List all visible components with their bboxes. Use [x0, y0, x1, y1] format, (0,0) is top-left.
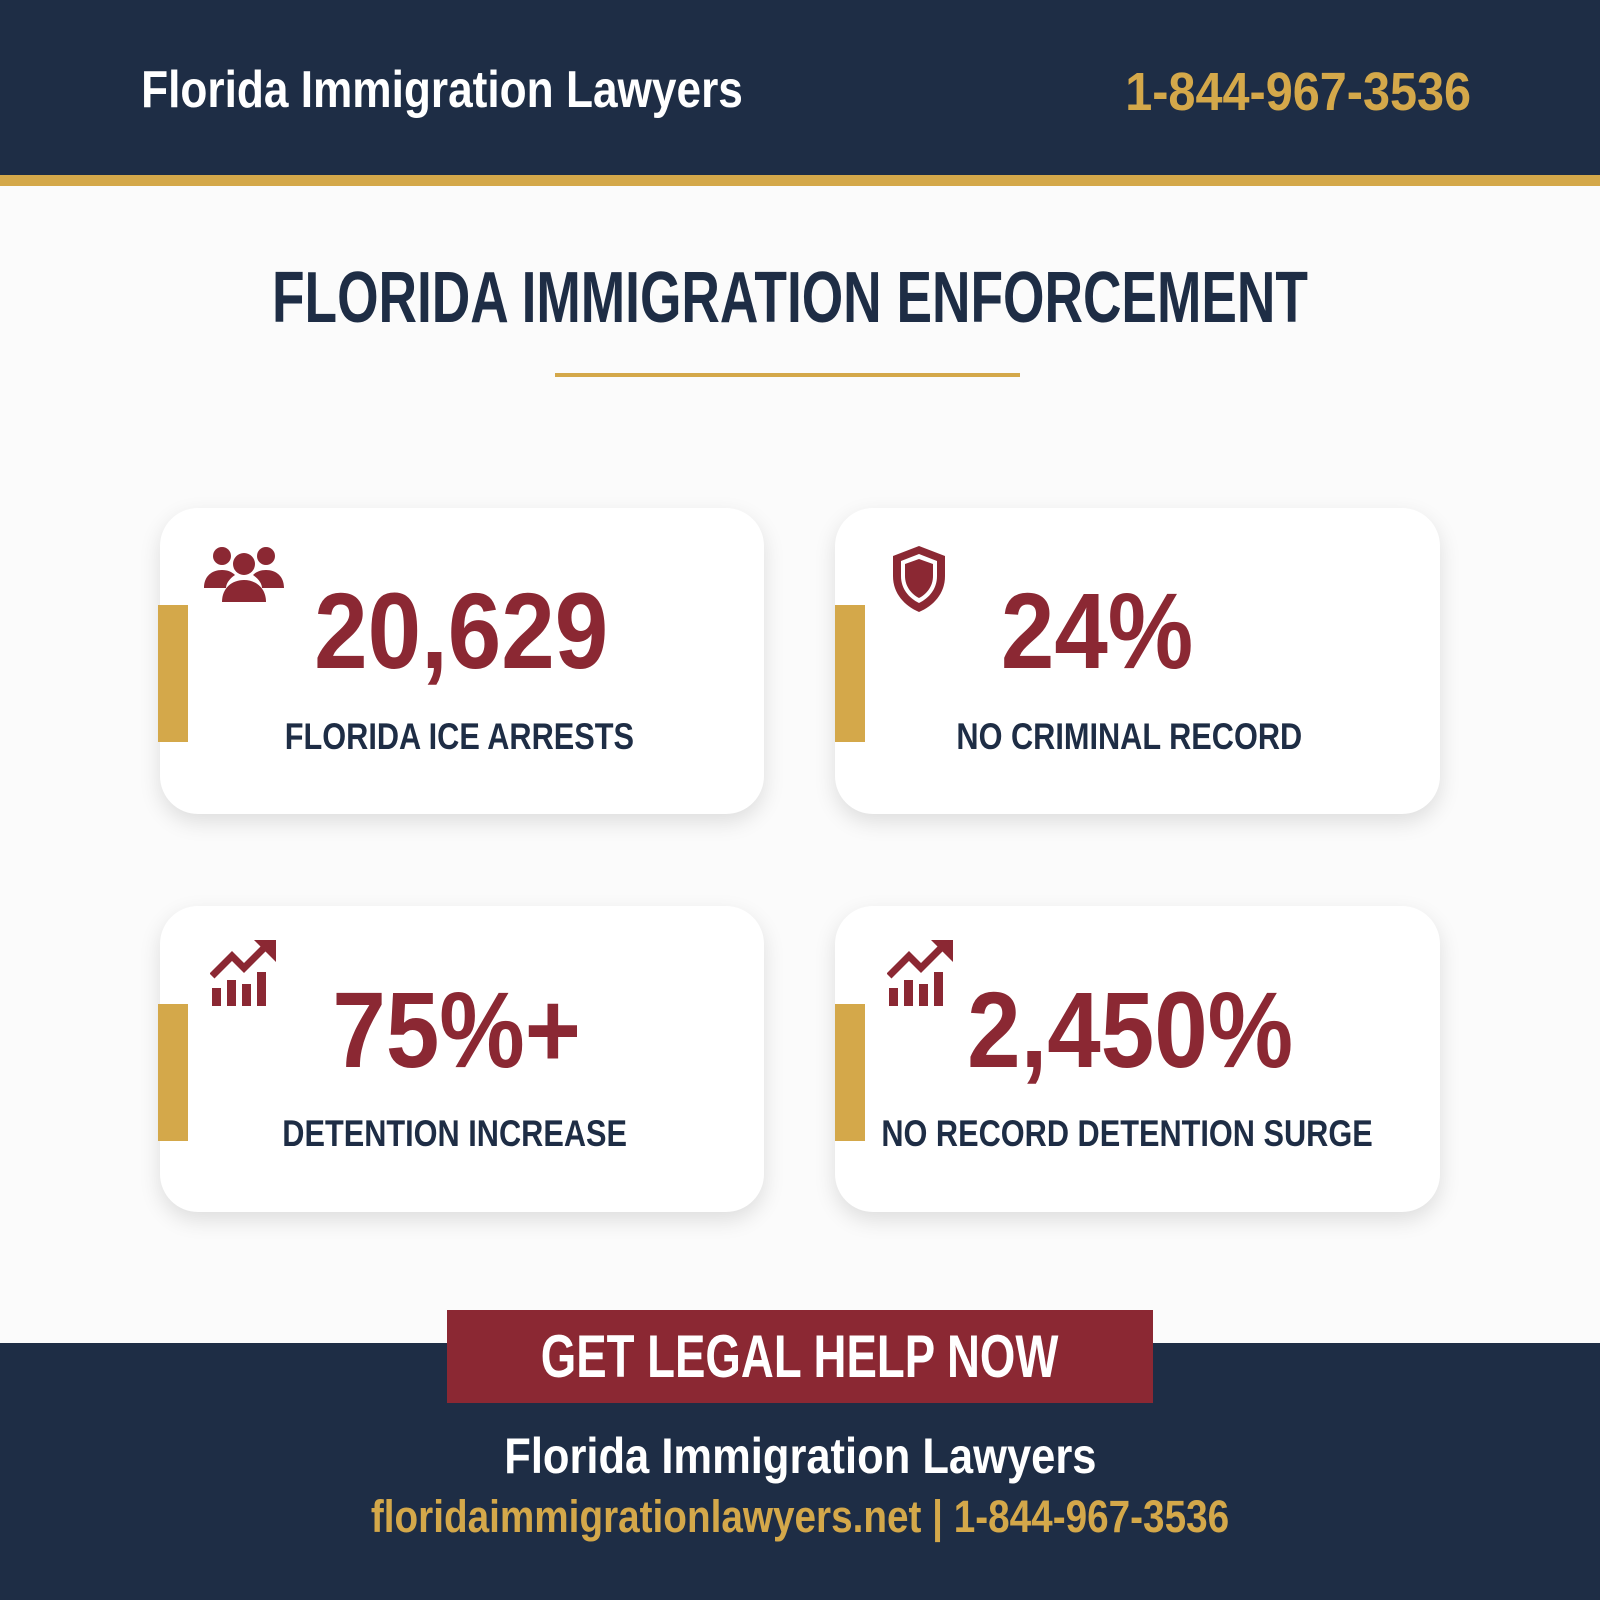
stat label: FLORIDA ICE ARRESTS — [284, 716, 634, 757]
title: FLORIDA IMMIGRATION ENFORCEMENT — [272, 258, 1308, 338]
footer firm name: Florida Immigration Lawyers — [504, 1428, 1096, 1484]
icon: people — [204, 547, 284, 602]
header firm name: Florida Immigration Lawyers — [141, 61, 743, 119]
CTA button — [447, 1310, 1153, 1403]
footer bar — [0, 1343, 1600, 1600]
card: no criminal record — [835, 508, 1440, 814]
icon: bar chart arrow — [210, 940, 276, 1006]
stat number 2,450%: 2,450% — [967, 969, 1293, 1090]
header bar — [0, 0, 1600, 175]
stat label: NO RECORD DETENTION SURGE — [881, 1113, 1373, 1154]
stat number 24%: 24% — [1001, 570, 1193, 691]
stat label: DETENTION INCREASE — [283, 1113, 627, 1154]
stat number 75%+: 75%+ — [333, 969, 581, 1090]
footer url and phone: floridaimmigrationlawyers.net | 1-844-967-3536 — [371, 1491, 1229, 1542]
stat number 20,629: 20,629 — [314, 570, 608, 691]
icon: bar chart arrow — [887, 940, 953, 1006]
CTA button: GET LEGAL HELP NOW — [541, 1323, 1059, 1390]
stat label: NO CRIMINAL RECORD — [956, 716, 1302, 757]
header phone: 1-844-967-3536 — [1125, 62, 1471, 122]
icon: shield — [893, 546, 945, 612]
card: no record detention surge — [835, 906, 1440, 1212]
card: ICE arrests — [160, 508, 764, 814]
card: detention increase — [160, 906, 764, 1212]
